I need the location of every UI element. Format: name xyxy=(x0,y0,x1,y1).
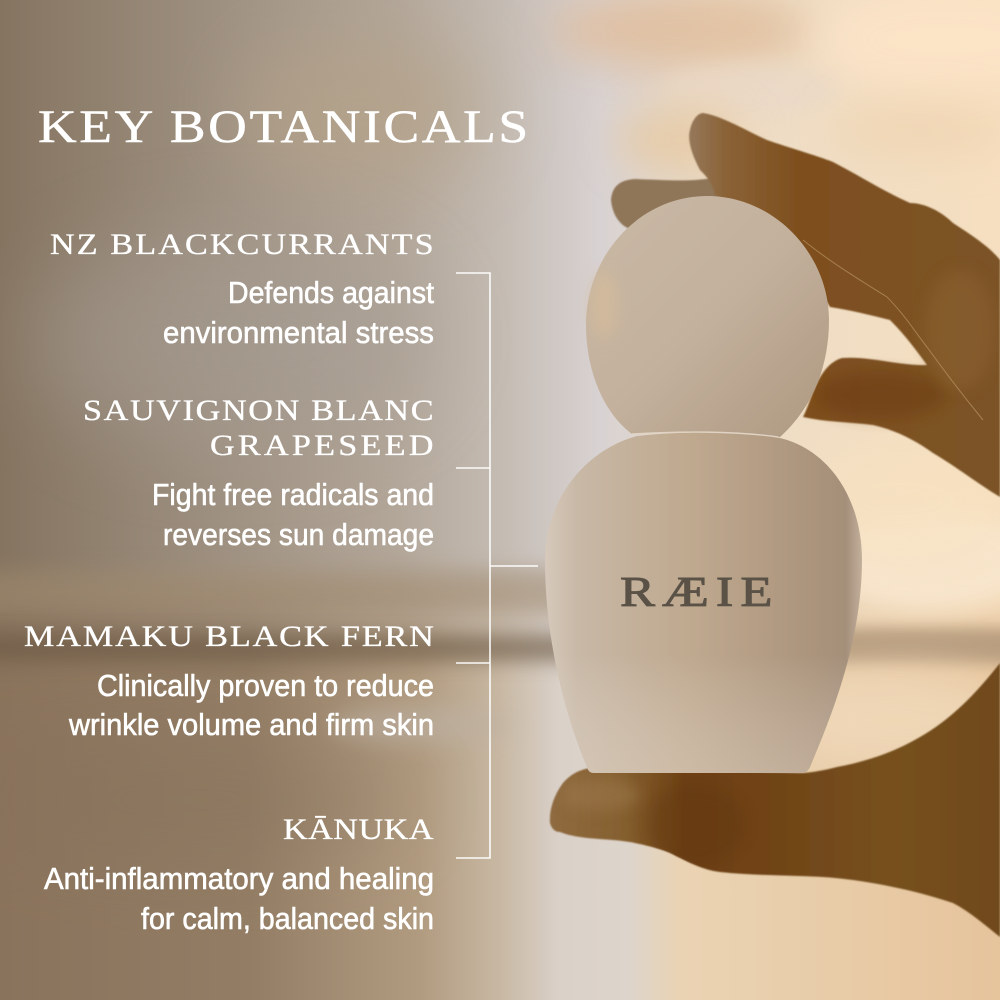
botanical 1: NZ blackcurrants: environmental stress xyxy=(163,315,434,350)
hand: second finger behind the cap xyxy=(611,178,735,230)
bottle logo: RÆIE xyxy=(620,570,772,616)
botanical 4: Kanuka: Anti-inflammatory and healing xyxy=(44,861,434,896)
lower finger shading xyxy=(815,371,945,419)
hand: thumb supporting the bottle from below xyxy=(550,663,1000,937)
bottle xyxy=(545,196,862,773)
thumb shading xyxy=(574,782,704,868)
bottle body xyxy=(545,432,862,773)
hand: index finger, palm and lower finger xyxy=(689,113,1000,497)
botanical 1: NZ blackcurrants: Defends against xyxy=(228,275,434,310)
botanical 3: Mamaku black fern xyxy=(24,619,434,742)
botanical 2: Sauvignon Blanc grapeseed xyxy=(83,393,434,552)
knuckle shading xyxy=(925,270,995,390)
cap highlight xyxy=(590,271,618,339)
seam between cap and body xyxy=(632,432,778,437)
botanical 3: Mamaku black fern: Clinically proven to reduce xyxy=(97,668,434,703)
botanical 2: Sauvignon Blanc grapeseed: GRAPESEED xyxy=(210,428,433,462)
bottle base light xyxy=(545,432,862,773)
title: KEY BOTANICALS xyxy=(38,100,528,152)
botanical 1: NZ blackcurrants: NZ BLACKCURRANTS xyxy=(50,227,434,261)
skin edge highlight xyxy=(803,240,983,420)
botanical 1: NZ blackcurrants xyxy=(50,227,434,350)
botanical 2: Sauvignon Blanc grapeseed: reverses sun damage xyxy=(163,517,434,552)
botanical 2: Sauvignon Blanc grapeseed: Fight free radicals and xyxy=(152,477,434,512)
botanical 4: Kanuka xyxy=(44,812,434,936)
botanical 3: Mamaku black fern: wrinkle volume and firm skin xyxy=(68,707,434,742)
botanical 2: Sauvignon Blanc grapeseed: SAUVIGNON BLANC xyxy=(83,393,434,427)
botanical 4: Kanuka: for calm, balanced skin xyxy=(141,901,434,936)
botanical 4: Kanuka: KĀNUKA xyxy=(283,812,433,846)
botanical 3: Mamaku black fern: MAMAKU BLACK FERN xyxy=(24,619,434,653)
bracket connector lines xyxy=(456,273,538,858)
bottle cap sphere xyxy=(586,196,829,437)
